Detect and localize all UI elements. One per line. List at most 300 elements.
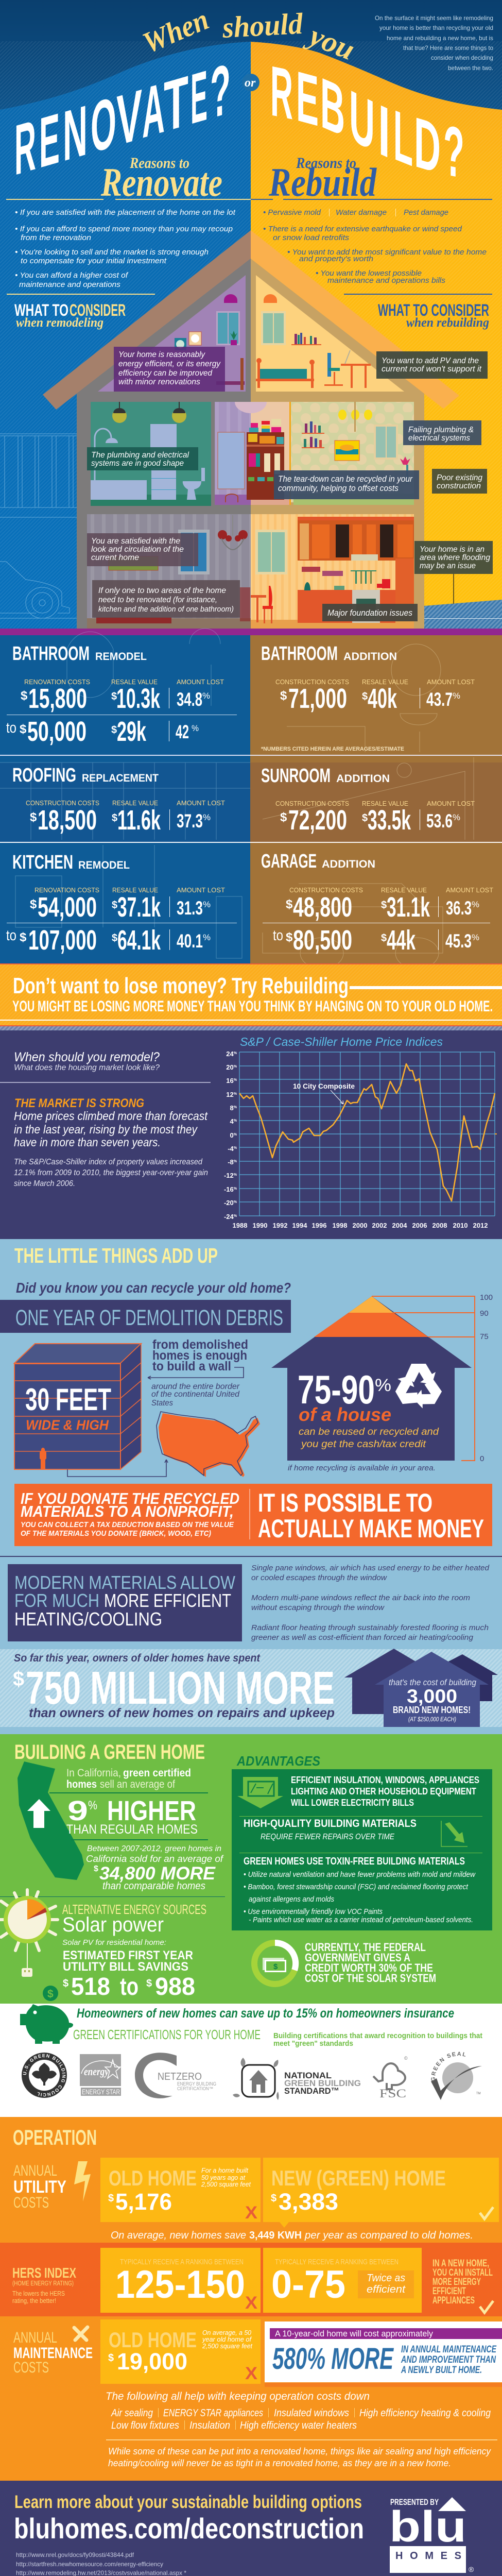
card: old home utility — [100, 2158, 261, 2223]
text: cost reducers list — [106, 2391, 497, 2468]
house chart: 75-90 percent: 90 — [480, 1309, 489, 1318]
market text: Home prices climbed more than forecast — [14, 1109, 208, 1123]
intro text: between the two. — [448, 64, 493, 72]
text: certification description: meet "green" standards — [273, 2039, 353, 2048]
icon: tools — [74, 2327, 88, 2340]
line chart: home price index — [224, 1050, 497, 1229]
house chart: 75-90 percent: of a house — [299, 1404, 391, 1425]
list: reasons to rebuild: Water damage — [336, 208, 387, 217]
ground and utility pole right — [424, 574, 502, 629]
market text: When should you remodel? — [14, 1050, 160, 1064]
intro text — [375, 14, 493, 72]
card: bathroom remodel: AMOUNT LOST — [177, 678, 224, 686]
text: cost reducers list: Insulation — [189, 2420, 230, 2431]
band: HERS index — [0, 2243, 502, 2316]
card: new green home utility: NEW (GREEN) HOME — [271, 2166, 446, 2190]
text: certification description — [273, 2031, 482, 2048]
card: garage addition: $ — [286, 930, 293, 944]
line chart: home price index: 2012 — [473, 1222, 488, 1229]
panel: footer — [0, 2481, 502, 2576]
callout: plumbing good: The plumbing and electrical — [91, 451, 189, 460]
text: from demolished homes — [148, 1337, 248, 1408]
card: garage addition: ADDITION — [322, 858, 375, 870]
line chart: home price index: % — [234, 1214, 237, 1218]
california green homes stat: homes — [66, 1778, 97, 1790]
row label: annual maintenance costs: MAINTENANCE — [13, 2345, 93, 2362]
heading: what to consider when rebuilding: when rebuilding — [406, 316, 489, 330]
house chart: 75-90 percent — [271, 1293, 493, 1472]
callout: foundation — [322, 604, 418, 621]
logo: blu homes — [389, 2497, 474, 2573]
line chart: home price index: 1990 — [253, 1222, 267, 1229]
callout: flooding: may be an issue — [420, 562, 476, 570]
title: renovate: O — [91, 81, 116, 168]
box: modern materials: MODERN MATERIALS ALLOW — [14, 1572, 235, 1593]
line chart: home price index: % — [234, 1173, 237, 1177]
callout: plumbing good: systems are in good shape — [91, 459, 184, 468]
california green homes stat: THAN REGULAR HOMES — [66, 1822, 198, 1837]
title: rebuild — [270, 50, 464, 194]
line chart: home price index: -16 — [224, 1185, 234, 1193]
title: rebuild: B — [320, 62, 345, 152]
card: kitchen remodel: 54,000 — [38, 892, 97, 923]
list: reasons to renovate: • If you can afford to spend more money than you may recoup — [15, 225, 233, 233]
market text: THE MARKET IS STRONG — [14, 1096, 144, 1110]
house chart: 75-90 percent: 75-90 — [298, 1367, 375, 1412]
text: cost reducers list: Insulated windows — [274, 2408, 349, 2419]
card: kitchen remodel: 37.1k — [117, 892, 161, 923]
title: when should you: you — [302, 18, 359, 66]
callout: look and circulation: current home — [91, 553, 139, 562]
heading: green certifications: GREEN CERTIFICATIONS FOR YOUR HOME — [73, 2027, 261, 2042]
text: new home appliances — [432, 2258, 493, 2313]
banner: one year of demolition debris: ONE YEAR OF DEMOLITION DEBRIS — [15, 1306, 283, 1330]
logo: netzero: CERTIFICATION™ — [177, 2086, 213, 2091]
card: sunroom addition: 72,200 — [288, 805, 347, 836]
line chart: home price index: 1994 — [292, 1222, 307, 1229]
roof — [43, 230, 251, 410]
intro text: On the surface it might seem like remodeling — [375, 14, 493, 22]
card: sunroom addition: RESALE VALUE — [362, 800, 408, 807]
card: new home rating: efficient — [367, 2284, 406, 2295]
line chart: home price index: -24 — [224, 1213, 234, 1221]
card: new home rating — [263, 2248, 422, 2313]
callout: poor construction: construction — [437, 482, 481, 490]
card: kitchen remodel: 107,000 — [28, 925, 97, 956]
card: bathroom addition: CONSTRUCTION COSTS — [275, 678, 349, 686]
box: modern materials: FOR MUCH — [14, 1590, 99, 1611]
box: advantages: • Use environmentally friendly low VOC Paints — [244, 1907, 383, 1916]
logo: energy star: ENERGY STAR — [82, 2088, 120, 2096]
card: roofing replacement: CONSTRUCTION COSTS — [26, 799, 99, 807]
card: bathroom remodel: % — [202, 691, 210, 701]
solar power text: UTILITY BILL SAVINGS — [63, 1960, 188, 1974]
source list — [16, 2551, 331, 2576]
card: garage addition: CONSTRUCTION COSTS — [289, 886, 363, 894]
card: garage addition: % — [472, 900, 479, 909]
card: kitchen remodel: $ — [20, 930, 27, 944]
chart annotation: 10 City Composite — [293, 1082, 355, 1090]
market text: 12.1% from 2009 to 2010, the biggest year-over-year gain — [14, 1168, 208, 1177]
callout: 580 percent more: A 10-year-old home will cost approximately — [275, 2329, 433, 2338]
icon: lightning bolt — [74, 2161, 91, 2201]
panel: operation — [0, 2117, 502, 2481]
card: roofing replacement: 18,500 — [38, 805, 97, 836]
line chart: home price index: 4 — [230, 1117, 234, 1125]
card: garage addition: % — [472, 933, 479, 942]
text: windows and heating: Radiant floor heating through sustainably forested flooring is much — [251, 1623, 489, 1632]
lower left room — [87, 514, 251, 629]
wall illustration: 30 FEET — [25, 1382, 111, 1417]
box: modern materials: MORE EFFICIENT — [104, 1590, 231, 1611]
text: windows and heating: Single pane windows, air which has used energy to be either heated — [251, 1564, 490, 1572]
card: garage addition: 44k — [387, 925, 416, 956]
card: old home rating — [100, 2248, 261, 2313]
band: HERS index: rating, the better! — [12, 2297, 56, 2304]
panel: header, renovate or rebuild: ? — [443, 110, 464, 194]
source list: http://startfresh.newhomesource.com/energy-efficiency — [16, 2561, 163, 2568]
houses graphic — [344, 1649, 498, 1727]
text: from demolished homes: States — [151, 1399, 173, 1408]
solar power text: Solar power — [62, 1913, 164, 1936]
card: kitchen remodel: AMOUNT LOST — [177, 886, 225, 894]
panel: housing market — [0, 1026, 502, 1239]
text: average savings: per year as compared to old homes. — [304, 2230, 473, 2241]
text: average savings: 3,449 KWH — [249, 2230, 302, 2241]
card: sunroom addition: $ — [280, 810, 287, 824]
callout: one to two areas: kitchen and the addition of one bathroom) — [98, 605, 234, 614]
closet room — [215, 402, 291, 505]
title: rebuild: E — [296, 56, 319, 141]
title: renovate: T — [164, 60, 188, 147]
california green homes stat: In California, — [66, 1767, 121, 1779]
solar power text: 518 — [71, 1973, 110, 2001]
houses graphic: BRAND NEW HOMES! — [393, 1705, 471, 1715]
card: bathroom addition: $ — [362, 691, 368, 702]
solar power text — [62, 1902, 206, 2001]
callout: add PV — [376, 351, 488, 379]
callout: flooding: area where flooding — [420, 553, 490, 562]
band: 750 million more: $ — [13, 1668, 24, 1690]
callout: one to two areas: need to be renovated (for instance, — [98, 596, 217, 604]
line chart: home price index: 24 — [226, 1050, 234, 1058]
line chart: home price index: % — [234, 1052, 237, 1055]
blueprint garage and car outline — [0, 434, 77, 618]
card: new home rating: 0-75 — [271, 2263, 345, 2307]
intro text: consider when deciding — [431, 54, 493, 61]
title: when should you — [138, 3, 359, 66]
card: kitchen remodel: $ — [112, 900, 117, 911]
card: sunroom addition: 53.6 — [426, 810, 453, 832]
card: new green home utility: $ — [271, 2193, 276, 2204]
callout: one to two areas — [92, 580, 240, 618]
house chart: 75-90 percent: 75 — [480, 1332, 489, 1341]
line chart: home price index: 12 — [226, 1091, 234, 1098]
box: modern materials: HEATING/COOLING — [14, 1608, 162, 1630]
card: old home maintenance: 2,500 square feet — [202, 2342, 253, 2350]
panel: insurance and certifications — [0, 1986, 502, 2117]
card: garage addition: $ — [286, 897, 293, 911]
source list: http://www.nrel.gov/docs/fy09osti/43844.pdf — [16, 2551, 134, 2558]
card: sunroom addition: $ — [362, 812, 368, 824]
icon: piggy bank: $ — [47, 1988, 54, 2000]
box: advantages: • Bamboo, forest stewardship council (FSC) and reclaimed flooring protect — [244, 1883, 469, 1891]
card: roofing replacement: AMOUNT LOST — [177, 799, 225, 807]
or badge: or — [245, 76, 256, 90]
text: federal credit: COST OF THE SOLAR SYSTEM — [305, 1972, 436, 1985]
logo: blu homes: ® — [469, 2565, 474, 2573]
heading: reasons to renovate: Renovate — [100, 160, 222, 205]
card: bathroom remodel: 10.3k — [116, 683, 161, 714]
box: advantages: REQUIRE FEWER REPAIRS OVER TIME — [261, 1833, 394, 1841]
intro text: your home is better than recycling your old — [379, 24, 493, 31]
box: advantages: - Paints which use water as a carrier instead of petroleum-based solvents. — [249, 1916, 473, 1924]
callout: energy efficient: efficiency can be improved — [118, 369, 213, 378]
california green homes stat: HIGHER — [107, 1795, 196, 1826]
list: reasons to renovate — [15, 208, 236, 289]
callout: 580 percent more — [265, 2321, 502, 2387]
heading: what to consider when remodeling — [14, 301, 126, 330]
text: average savings: On average, new homes save — [111, 2230, 246, 2241]
title: when should you: When — [138, 3, 214, 60]
card: bathroom remodel: $ — [21, 689, 28, 703]
card: old home maintenance: X — [245, 2364, 257, 2383]
logo: netzero: NETZERO — [158, 2071, 202, 2082]
card: kitchen remodel: RESALE VALUE — [112, 886, 158, 894]
text: windows and heating — [251, 1564, 490, 1642]
card: garage addition: 36.3 — [446, 897, 472, 919]
house chart: 75-90 percent: can be reused or recycled and — [299, 1427, 440, 1437]
logo: national green building standard — [233, 2058, 361, 2100]
card: sunroom addition: ADDITION — [336, 773, 390, 785]
icon: piggy bank — [20, 1986, 73, 2044]
callout: poor construction: Poor existing — [437, 473, 482, 482]
map: united states — [67, 1412, 260, 1477]
title: rebuild: L — [393, 95, 413, 182]
text: cost reducers list: High efficiency water heaters — [240, 2420, 357, 2431]
box: advantages: WILL LOWER ELECTRICITY BILLS — [291, 1798, 414, 1808]
line chart: home price index: % — [234, 1200, 237, 1204]
line chart: home price index: 2000 — [353, 1222, 367, 1229]
title: when should you: should — [221, 7, 304, 44]
panel: cost comparison — [0, 629, 502, 969]
left blue panel — [0, 42, 251, 635]
california green homes stat: sell an average of — [100, 1778, 175, 1790]
market text: have in more than seven years. — [14, 1136, 161, 1149]
line chart: home price index: % — [234, 1065, 237, 1069]
title: rebuild: I — [378, 89, 390, 174]
line chart: home price index: 1992 — [273, 1222, 287, 1229]
card: old home utility: 50 years ago at — [201, 2174, 246, 2181]
row label: annual utility costs: UTILITY — [13, 2177, 66, 2197]
text: federal credit: CURRENTLY, THE FEDERAL — [305, 1941, 426, 1954]
wallpaper room — [291, 402, 414, 505]
callout: tear-down: The tear-down can be recycled in your — [278, 474, 413, 484]
heading: what to consider when remodeling: WHAT TO — [14, 301, 68, 319]
callout: donate materials: IF YOU DONATE THE RECYCLED — [21, 1489, 239, 1507]
card: roofing replacement: RESALE VALUE — [112, 799, 158, 807]
heading: reasons to renovate: Reasons to — [129, 155, 189, 172]
chart annotation — [293, 1082, 355, 1104]
card: sunroom addition: AMOUNT LOST — [427, 800, 475, 807]
card: garage addition: 80,500 — [293, 925, 352, 956]
card: roofing replacement — [12, 765, 225, 836]
market text — [0, 1050, 211, 1188]
call to action: bluhomes.com/deconstruction — [14, 2512, 364, 2545]
heading: what to consider when remodeling: when remodeling — [16, 316, 103, 330]
card: garage addition: GARAGE — [261, 851, 317, 872]
card: garage addition: to — [273, 927, 283, 944]
list: reasons to rebuild: • There is a need for extensive earthquake or wind speed — [263, 225, 462, 233]
logo: green seal: TM — [476, 2092, 481, 2095]
card: bathroom addition: 43.7 — [426, 689, 453, 710]
card: garage addition — [261, 851, 493, 956]
heading: what to consider when remodeling: CONSIDER — [70, 301, 126, 319]
callout: donate materials: IT IS POSSIBLE TO — [258, 1488, 432, 1517]
card: sunroom addition: 33.5k — [368, 805, 411, 836]
text: from demolished homes: of the continental United — [151, 1390, 240, 1399]
card: bathroom addition: RESALE VALUE — [362, 678, 408, 686]
house chart: 75-90 percent: you get the cash/tax credit — [300, 1439, 426, 1450]
callout: foundation: Major foundation issues — [327, 608, 412, 618]
text: cost reducers list: ENERGY STAR appliances — [163, 2408, 263, 2419]
card: old home utility: 5,176 — [115, 2189, 172, 2215]
heading: advantages: ADVANTAGES — [236, 1753, 321, 1769]
callout: failing plumbing — [403, 420, 481, 445]
card: bathroom remodel: 34.8 — [177, 689, 202, 710]
card: roofing replacement: REPLACEMENT — [82, 772, 159, 784]
card: roofing replacement: 37.3 — [177, 810, 203, 832]
logo: national green building standard: GREEN BUILDING — [284, 2078, 361, 2088]
title: rebuild: D — [414, 101, 441, 189]
logo: USGBC: U.S. GREEN BUILDING COUNCIL — [23, 2054, 66, 2097]
card: new home rating: Twice as — [367, 2273, 405, 2284]
callout: tear-down — [274, 470, 419, 499]
solar power text: Solar PV for residential home: — [62, 1938, 166, 1947]
line chart: home price index: -8 — [228, 1158, 234, 1166]
row label: annual utility costs: COSTS — [13, 2194, 49, 2211]
list: reasons to rebuild: and property's worth — [299, 255, 373, 263]
intro text: that true? Here are some things to — [403, 44, 493, 52]
bathroom room — [91, 402, 211, 506]
card: old home maintenance: On average, a 50 — [202, 2329, 252, 2336]
row label: annual utility costs: ANNUAL — [13, 2162, 57, 2179]
line chart: home price index: 16 — [226, 1077, 234, 1084]
text: windows and heating: Modern multi-pane windows reflect the air back into the room — [251, 1594, 470, 1602]
card: bathroom remodel: $ — [111, 691, 117, 702]
logo: FSC — [373, 2056, 408, 2100]
line chart: home price index: % — [234, 1119, 237, 1123]
line chart: home price index: 2002 — [372, 1222, 387, 1229]
solar power text: $ — [63, 1978, 68, 1989]
card: bathroom remodel: 50,000 — [27, 716, 86, 747]
card: kitchen remodel: 31.3 — [177, 897, 203, 919]
card: kitchen remodel — [6, 852, 237, 956]
list: reasons to rebuild: or snow load retrofits — [273, 233, 350, 242]
band: 750 million more: So far this year, owners of older homes have spent — [14, 1652, 261, 1664]
line chart: home price index: % — [234, 1146, 237, 1150]
house chart: 75-90 percent: 0 — [480, 1454, 484, 1463]
line chart: home price index: 1988 — [233, 1222, 247, 1229]
banner heading: Don’t want to lose money? Try Rebuilding — [13, 973, 349, 998]
card: old home maintenance: year old home of — [202, 2335, 252, 2343]
card: bathroom addition: 40k — [368, 683, 397, 714]
card: new green home utility: 3,383 — [279, 2189, 338, 2215]
title: rebuild: U — [349, 75, 375, 167]
card: old home utility: For a home built — [201, 2166, 249, 2174]
right yellow panel — [251, 42, 502, 635]
callout: add PV: current roof won't support it — [382, 365, 482, 374]
text: new home appliances: EFFICIENT — [432, 2286, 466, 2297]
row label: annual maintenance costs: ANNUAL — [13, 2329, 57, 2346]
line chart: home price index: 20 — [226, 1063, 234, 1071]
card: bathroom remodel: $ — [20, 722, 27, 736]
card: bathroom addition: *NUMBERS CITED HEREIN ARE AVERAGES/ESTIMATE — [261, 746, 404, 752]
market text: in the last year, rising by the most they — [14, 1123, 198, 1136]
card: kitchen remodel: % — [203, 900, 211, 909]
callout: one to two areas: If only one to two areas of the home — [98, 586, 226, 595]
line chart: home price index: 2008 — [432, 1222, 447, 1229]
box: modern materials — [8, 1564, 242, 1641]
line chart: home price index: 1996 — [312, 1222, 326, 1229]
card: kitchen remodel: 64.1k — [117, 925, 161, 956]
title: renovate: R — [14, 104, 36, 190]
solar power text: 988 — [155, 1973, 195, 2001]
list: reasons to rebuild: • You want the lowest possible — [316, 269, 422, 278]
list: reasons to rebuild: Pest damage — [404, 208, 448, 217]
california green homes stat: green certified — [123, 1767, 191, 1779]
houses graphic: 3,000 — [407, 1686, 457, 1707]
card: bathroom remodel: % — [192, 723, 199, 733]
band: HERS index: (HOME ENERGY RATING) — [12, 2279, 74, 2287]
text: federal credit: GOVERNMENT GIVES A — [305, 1951, 410, 1964]
text: new home appliances: APPLIANCES — [432, 2295, 475, 2306]
icon: solar credit donut: $ — [273, 1962, 278, 1971]
card: roofing replacement: % — [203, 812, 211, 822]
logo: FSC: FSC — [379, 2087, 406, 2100]
chart title: S&P / Case-Shiller Home Price Indices — [240, 1035, 443, 1048]
card: garage addition: RESALE VALUE — [381, 886, 427, 894]
band: 750 million more — [0, 1649, 502, 1727]
banner: try rebuilding — [0, 963, 502, 1026]
logo: blu homes: HOMES — [395, 2550, 461, 2562]
card: kitchen remodel: KITCHEN — [12, 852, 73, 873]
card: bathroom addition: $ — [280, 689, 287, 703]
line chart: home price index: -20 — [224, 1199, 234, 1207]
card: garage addition: $ — [381, 900, 387, 911]
list: reasons to renovate: to compensate for your initial investment — [21, 257, 167, 265]
text: cost reducers list: While some of these can be put into a renovated home, things like air sealing and high efficiency — [108, 2446, 491, 2456]
card: bathroom remodel: to — [6, 720, 16, 736]
callout: look and circulation: You are satisfied with the — [91, 537, 180, 546]
box: advantages: against allergens and molds — [249, 1895, 334, 1904]
call to action: Learn more about your sustainable building options — [14, 2492, 362, 2512]
card: new green home utility — [263, 2158, 499, 2228]
panel: the little things add up — [0, 1239, 502, 1734]
lower right room — [251, 514, 414, 629]
logo: FSC: © — [404, 2056, 408, 2061]
card: old home maintenance: 19,000 — [117, 2348, 187, 2375]
card: old home maintenance: $ — [108, 2352, 114, 2364]
california green homes stat: California sold for an average of — [86, 1854, 224, 1864]
subheading: Did you know you can recycle your old home? — [16, 1280, 291, 1296]
callout: failing plumbing: electrical systems — [408, 434, 470, 443]
callout: 580 percent more: 580% MORE — [272, 2342, 394, 2376]
california map with arrow — [18, 1761, 84, 1880]
card: old home utility: OLD HOME — [109, 2166, 197, 2190]
text: windows and heating: greener as well as cost-efficient than forced air heating/cooling — [251, 1633, 474, 1642]
wall illustration — [14, 1344, 141, 1469]
